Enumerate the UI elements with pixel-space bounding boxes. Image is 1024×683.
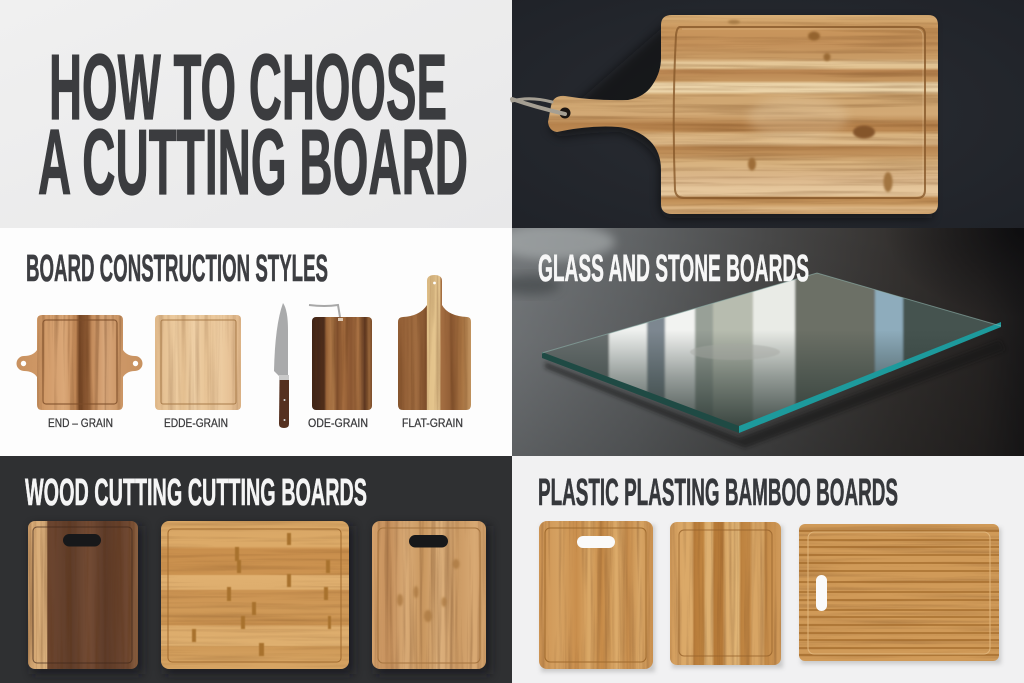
panel: title <box>0 0 512 228</box>
panel: title: A CUTTING BOARD <box>38 110 468 214</box>
icon: bamboo paddle board <box>548 15 938 214</box>
heading: how to choose a cutting board: HOW TO CHOOSE <box>49 35 447 139</box>
paddle board shadow <box>548 20 932 218</box>
icon: light wood board with handle <box>372 521 486 669</box>
label: edde grain: EDDE-GRAIN <box>164 418 228 430</box>
heading: wood cutting cutting boards: WOOD CUTTING CUTTING BOARDS <box>25 472 367 514</box>
panel: glass and stone boards <box>495 224 1024 456</box>
panel: wood cutting boards <box>0 456 512 683</box>
icon: knife <box>274 303 289 428</box>
icon: striped bamboo board <box>670 522 781 665</box>
icon: walnut board <box>28 521 138 669</box>
panel: board construction styles <box>0 228 512 456</box>
icon: end-grain board <box>17 315 143 410</box>
heading: how to choose a cutting board <box>38 35 468 214</box>
icon: edge-grain board <box>155 315 241 410</box>
icon: rope <box>512 99 565 114</box>
icon: bamboo board with handle <box>539 521 653 669</box>
glass shadow <box>545 340 1005 448</box>
icon: flat-grain paddle board <box>398 275 471 410</box>
panel: board construction styles: BOARD CONSTRUCTION STYLES <box>26 248 328 290</box>
label: end grain: END – GRAIN <box>48 418 113 430</box>
icon: dark striped board with loop <box>309 305 372 410</box>
panel: paddle board photo <box>512 0 1024 228</box>
board shadows <box>32 526 490 674</box>
board shadows <box>541 525 1001 672</box>
label: ode grain: ODE-GRAIN <box>308 418 368 430</box>
icon: ribbed bamboo board <box>799 524 999 661</box>
icon: glass board <box>542 272 1002 433</box>
icon: bamboo brick-pattern board <box>161 521 349 669</box>
panel: plastic and bamboo boards <box>512 456 1024 683</box>
label: flat grain: FLAT-GRAIN <box>402 418 463 430</box>
